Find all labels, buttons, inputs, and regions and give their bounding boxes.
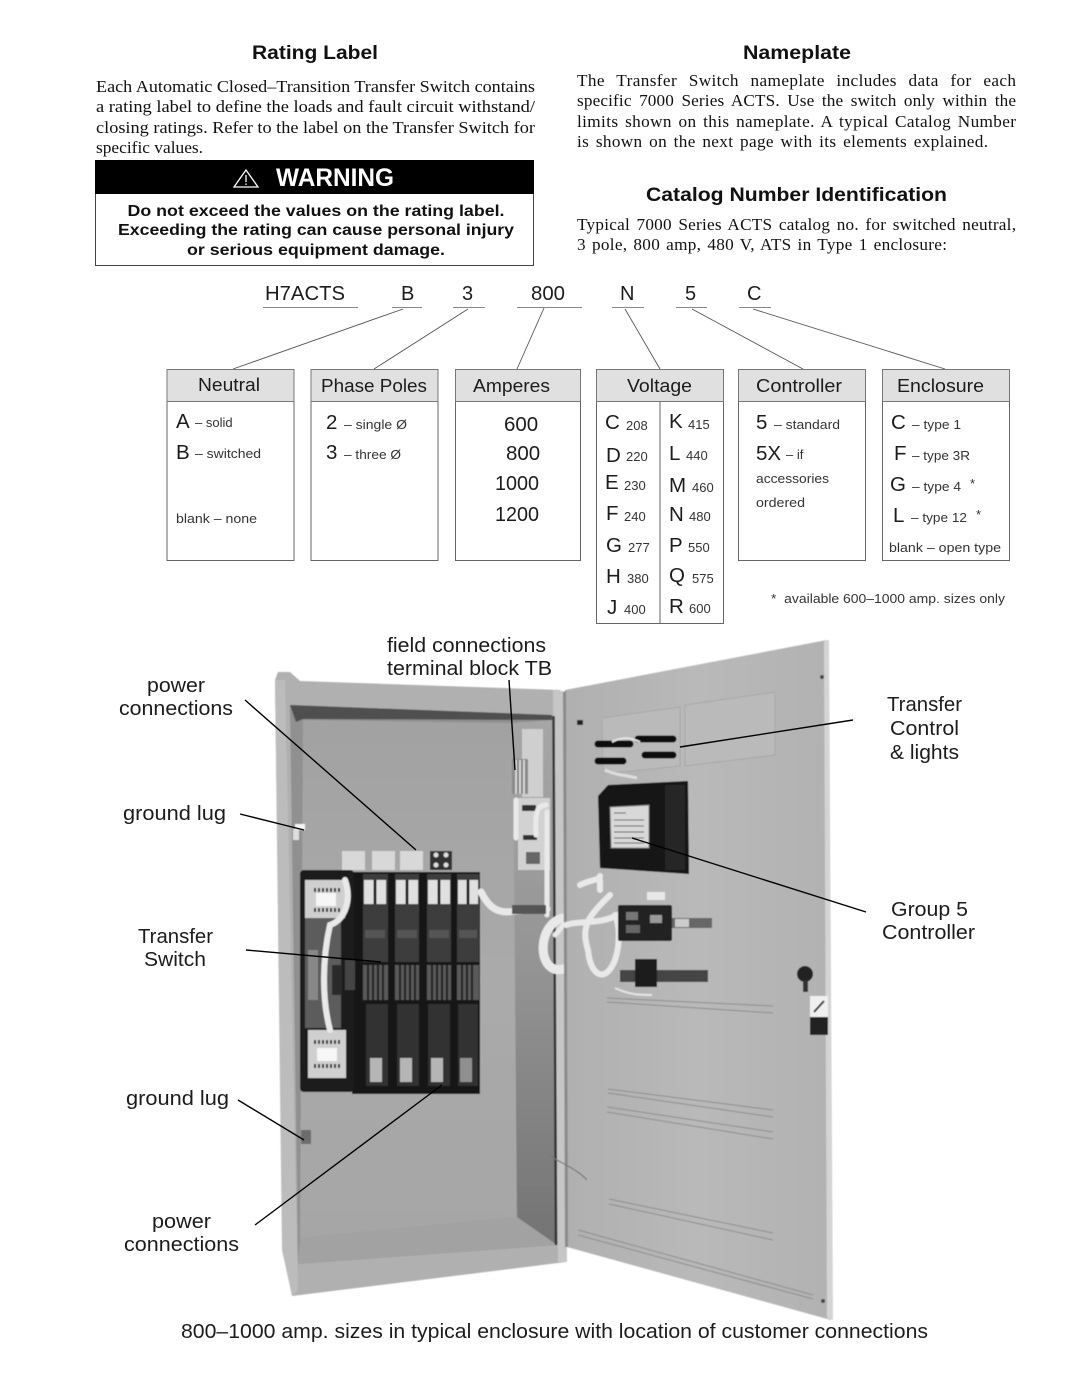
panel: voltage: 400 bbox=[624, 602, 646, 617]
heading: nameplate: Nameplate bbox=[743, 43, 851, 64]
heading: rating label: Rating Label bbox=[252, 43, 378, 64]
label: power connections lower: connections bbox=[124, 1233, 239, 1256]
panel: voltage: N bbox=[669, 503, 684, 526]
panel: warning bbox=[95, 160, 534, 266]
panel: voltage: 600 bbox=[689, 601, 711, 616]
panel: enclosure: – type 1 bbox=[912, 417, 961, 432]
wiring harness bbox=[481, 892, 590, 970]
control wiring on door bbox=[566, 876, 619, 974]
panel: voltage: R bbox=[669, 595, 684, 618]
text block: rating label description: closing ratings. Refer to the label on the Transfer Switch for bbox=[96, 118, 535, 137]
door handle key bbox=[797, 966, 813, 992]
catalog number code row: 5 bbox=[685, 283, 696, 305]
panel: voltage: 240 bbox=[624, 509, 646, 524]
door ribs bbox=[578, 998, 813, 1299]
label: ground lug lower: ground lug bbox=[126, 1087, 229, 1110]
panel: voltage: C bbox=[605, 411, 620, 434]
ground lug upper bbox=[293, 824, 305, 840]
footnote: * available 600–1000 amp. sizes only bbox=[771, 591, 1006, 606]
indicator lights bbox=[598, 738, 673, 778]
panel: voltage: H bbox=[606, 565, 621, 588]
panel: voltage: 460 bbox=[692, 480, 714, 495]
panel: enclosure: G bbox=[890, 473, 906, 496]
panel: enclosure: * bbox=[976, 507, 981, 522]
label: field connections terminal block TB: field connections bbox=[387, 634, 546, 657]
panel: enclosure: Enclosure bbox=[897, 375, 984, 396]
section: rating label bbox=[96, 43, 535, 157]
warning message: or serious equipment damage. bbox=[187, 242, 445, 259]
label: power connections lower: power bbox=[152, 1210, 211, 1233]
panel: voltage bbox=[596, 370, 724, 624]
panel: amperes: 800 bbox=[506, 442, 540, 465]
panel: neutral: blank – none bbox=[176, 511, 257, 526]
panel: voltage: 277 bbox=[628, 540, 650, 555]
terminal block TB bbox=[512, 729, 550, 915]
catalog number code row: 800 bbox=[531, 283, 565, 305]
panel: voltage: 220 bbox=[626, 449, 648, 464]
panel: enclosure: C bbox=[891, 411, 906, 434]
panel: phase poles bbox=[311, 370, 438, 560]
catalog number code row: N bbox=[620, 283, 634, 305]
panel: controller: – if bbox=[786, 447, 804, 462]
transfer switch: top lugs bbox=[342, 851, 452, 870]
label: transfer switch bbox=[138, 925, 213, 971]
panel: neutral: A bbox=[176, 410, 190, 433]
panel: controller: accessories bbox=[756, 471, 830, 486]
text block: rating label description: Each Automatic Closed–Transition Transfer Switch contains bbox=[96, 77, 535, 96]
panel: neutral: B bbox=[176, 441, 190, 464]
group 5 controller bbox=[598, 781, 689, 874]
warning message bbox=[118, 203, 514, 259]
panel: voltage: Voltage bbox=[627, 375, 692, 396]
warning message: Do not exceed the values on the rating label. bbox=[128, 203, 504, 220]
label: group 5 controller bbox=[882, 898, 975, 944]
panel: enclosure: F bbox=[894, 442, 907, 465]
grounding wire bbox=[550, 1156, 587, 1180]
label: power connections upper bbox=[119, 674, 233, 720]
panel: neutral: – solid bbox=[195, 415, 233, 430]
caption: 800–1000 amp. sizes in typical enclosure with location of customer connections bbox=[181, 1320, 928, 1343]
panel: voltage: J bbox=[607, 596, 617, 619]
panel: amperes: 600 bbox=[504, 413, 538, 436]
text block: catalog example bbox=[577, 215, 1016, 254]
catalog number code row bbox=[263, 283, 771, 308]
panel: voltage: 575 bbox=[692, 571, 714, 586]
panel: neutral: – switched bbox=[195, 446, 261, 461]
panel: voltage: 550 bbox=[688, 540, 710, 555]
leader lines from code to tables bbox=[233, 308, 945, 369]
panel: voltage: F bbox=[606, 502, 619, 525]
label: group 5 controller: Controller bbox=[882, 921, 975, 944]
door bbox=[550, 640, 833, 1320]
clear plates bbox=[602, 692, 775, 774]
panel: amperes bbox=[456, 370, 580, 560]
label: transfer control and lights: Control bbox=[890, 717, 959, 740]
section: catalog number identification bbox=[577, 185, 1016, 254]
ground lug lower bbox=[301, 1130, 311, 1144]
label: power connections upper: power bbox=[147, 674, 205, 697]
catalog number code row: 3 bbox=[462, 283, 473, 305]
panel: enclosure: – type 3R bbox=[912, 448, 970, 463]
lower rail component bbox=[615, 959, 708, 995]
text block: nameplate description: specific 7000 Series ACTS. Use the switch only within the bbox=[577, 91, 1016, 110]
label: transfer control and lights: Transfer bbox=[887, 693, 962, 716]
panel: controller bbox=[738, 370, 866, 560]
panel: voltage: E bbox=[605, 471, 619, 494]
panel: phase poles: 2 bbox=[326, 411, 337, 434]
label: transfer control and lights bbox=[887, 693, 962, 764]
warning message: Exceeding the rating can cause personal injury bbox=[118, 222, 514, 239]
label: power connections lower bbox=[124, 1210, 239, 1256]
text block: nameplate description: The Transfer Switch nameplate includes data for each bbox=[577, 71, 1016, 90]
panel: neutral: Neutral bbox=[198, 374, 260, 395]
label: field connections terminal block TB: terminal block TB bbox=[387, 657, 552, 680]
panel: voltage: L bbox=[669, 442, 680, 465]
catalog number code row: C bbox=[747, 283, 761, 305]
icon: warning triangle bbox=[234, 170, 258, 187]
panel: amperes: Amperes bbox=[473, 375, 550, 396]
panel: controller: ordered bbox=[756, 495, 805, 510]
safety sticker bbox=[810, 996, 828, 1035]
catalog number code row: B bbox=[401, 283, 414, 305]
panel: voltage: 440 bbox=[686, 448, 708, 463]
label: transfer control and lights: & lights bbox=[890, 741, 959, 764]
transfer switch: poles bbox=[352, 872, 480, 1094]
label: transfer switch: Transfer bbox=[138, 925, 213, 948]
catalog number code row: H7ACTS bbox=[265, 283, 345, 305]
panel: enclosure: – type 12 bbox=[911, 510, 967, 525]
panel: voltage: 208 bbox=[626, 418, 648, 433]
callout lines bbox=[238, 680, 866, 1225]
panel: enclosure: * bbox=[970, 476, 975, 491]
enclosure cabinet bbox=[275, 672, 567, 1296]
panel: controller: Controller bbox=[756, 375, 842, 396]
panel: phase poles: – three Ø bbox=[344, 447, 401, 462]
panel: voltage: Q bbox=[669, 564, 685, 587]
warning heading: WARNING bbox=[276, 164, 394, 192]
photo: open transfer switch enclosure bbox=[275, 640, 833, 1320]
controller board bbox=[618, 892, 712, 941]
panel: enclosure: blank – open type bbox=[889, 540, 1001, 555]
panel: voltage: 230 bbox=[624, 478, 646, 493]
text block: nameplate description: limits shown on this nameplate. A typical Catalog Number bbox=[577, 112, 1016, 131]
panel: voltage: K bbox=[669, 410, 683, 433]
label: power connections upper: connections bbox=[119, 697, 233, 720]
text block: rating label description bbox=[96, 77, 535, 157]
panel: amperes: 1000 bbox=[495, 472, 539, 495]
text block: nameplate description: is shown on the next page with its elements explained. bbox=[577, 132, 988, 151]
text block: nameplate description bbox=[577, 71, 1016, 151]
panel: controller: – standard bbox=[774, 417, 840, 432]
label: field connections terminal block TB bbox=[387, 634, 552, 680]
section: nameplate bbox=[577, 43, 1016, 151]
panel: voltage: P bbox=[669, 534, 683, 557]
panel: phase poles: 3 bbox=[326, 441, 337, 464]
panel: voltage: 415 bbox=[688, 417, 710, 432]
label: ground lug upper: ground lug bbox=[123, 802, 226, 825]
panel: neutral bbox=[167, 370, 294, 560]
panel: voltage: G bbox=[606, 534, 622, 557]
panel: controller: 5 bbox=[756, 411, 767, 434]
heading: catalog number identification: Catalog Number Identification bbox=[646, 185, 947, 206]
panel: voltage: 380 bbox=[627, 571, 649, 586]
text block: rating label description: a rating label to define the loads and fault circuit withstand/ bbox=[96, 97, 535, 116]
label: transfer switch: Switch bbox=[144, 948, 206, 971]
panel: amperes: 1200 bbox=[495, 503, 539, 526]
panel: enclosure: L bbox=[893, 504, 904, 527]
text block: catalog example: Typical 7000 Series ACTS catalog no. for switched neutral, bbox=[577, 215, 1016, 234]
text block: catalog example: 3 pole, 800 amp, 480 V, ATS in Type 1 enclosure: bbox=[577, 235, 947, 254]
text block: rating label description: specific values. bbox=[96, 138, 203, 157]
transfer switch: left control section bbox=[300, 870, 355, 1092]
panel: enclosure bbox=[882, 370, 1010, 560]
panel: phase poles: – single Ø bbox=[344, 417, 407, 432]
panel: voltage: 480 bbox=[689, 509, 711, 524]
panel: voltage: D bbox=[606, 444, 621, 467]
panel: voltage: M bbox=[669, 474, 686, 497]
label: group 5 controller: Group 5 bbox=[891, 898, 968, 921]
panel: controller: 5X bbox=[756, 442, 781, 465]
panel: enclosure: – type 4 bbox=[912, 479, 961, 494]
panel: phase poles: Phase Poles bbox=[321, 375, 427, 396]
